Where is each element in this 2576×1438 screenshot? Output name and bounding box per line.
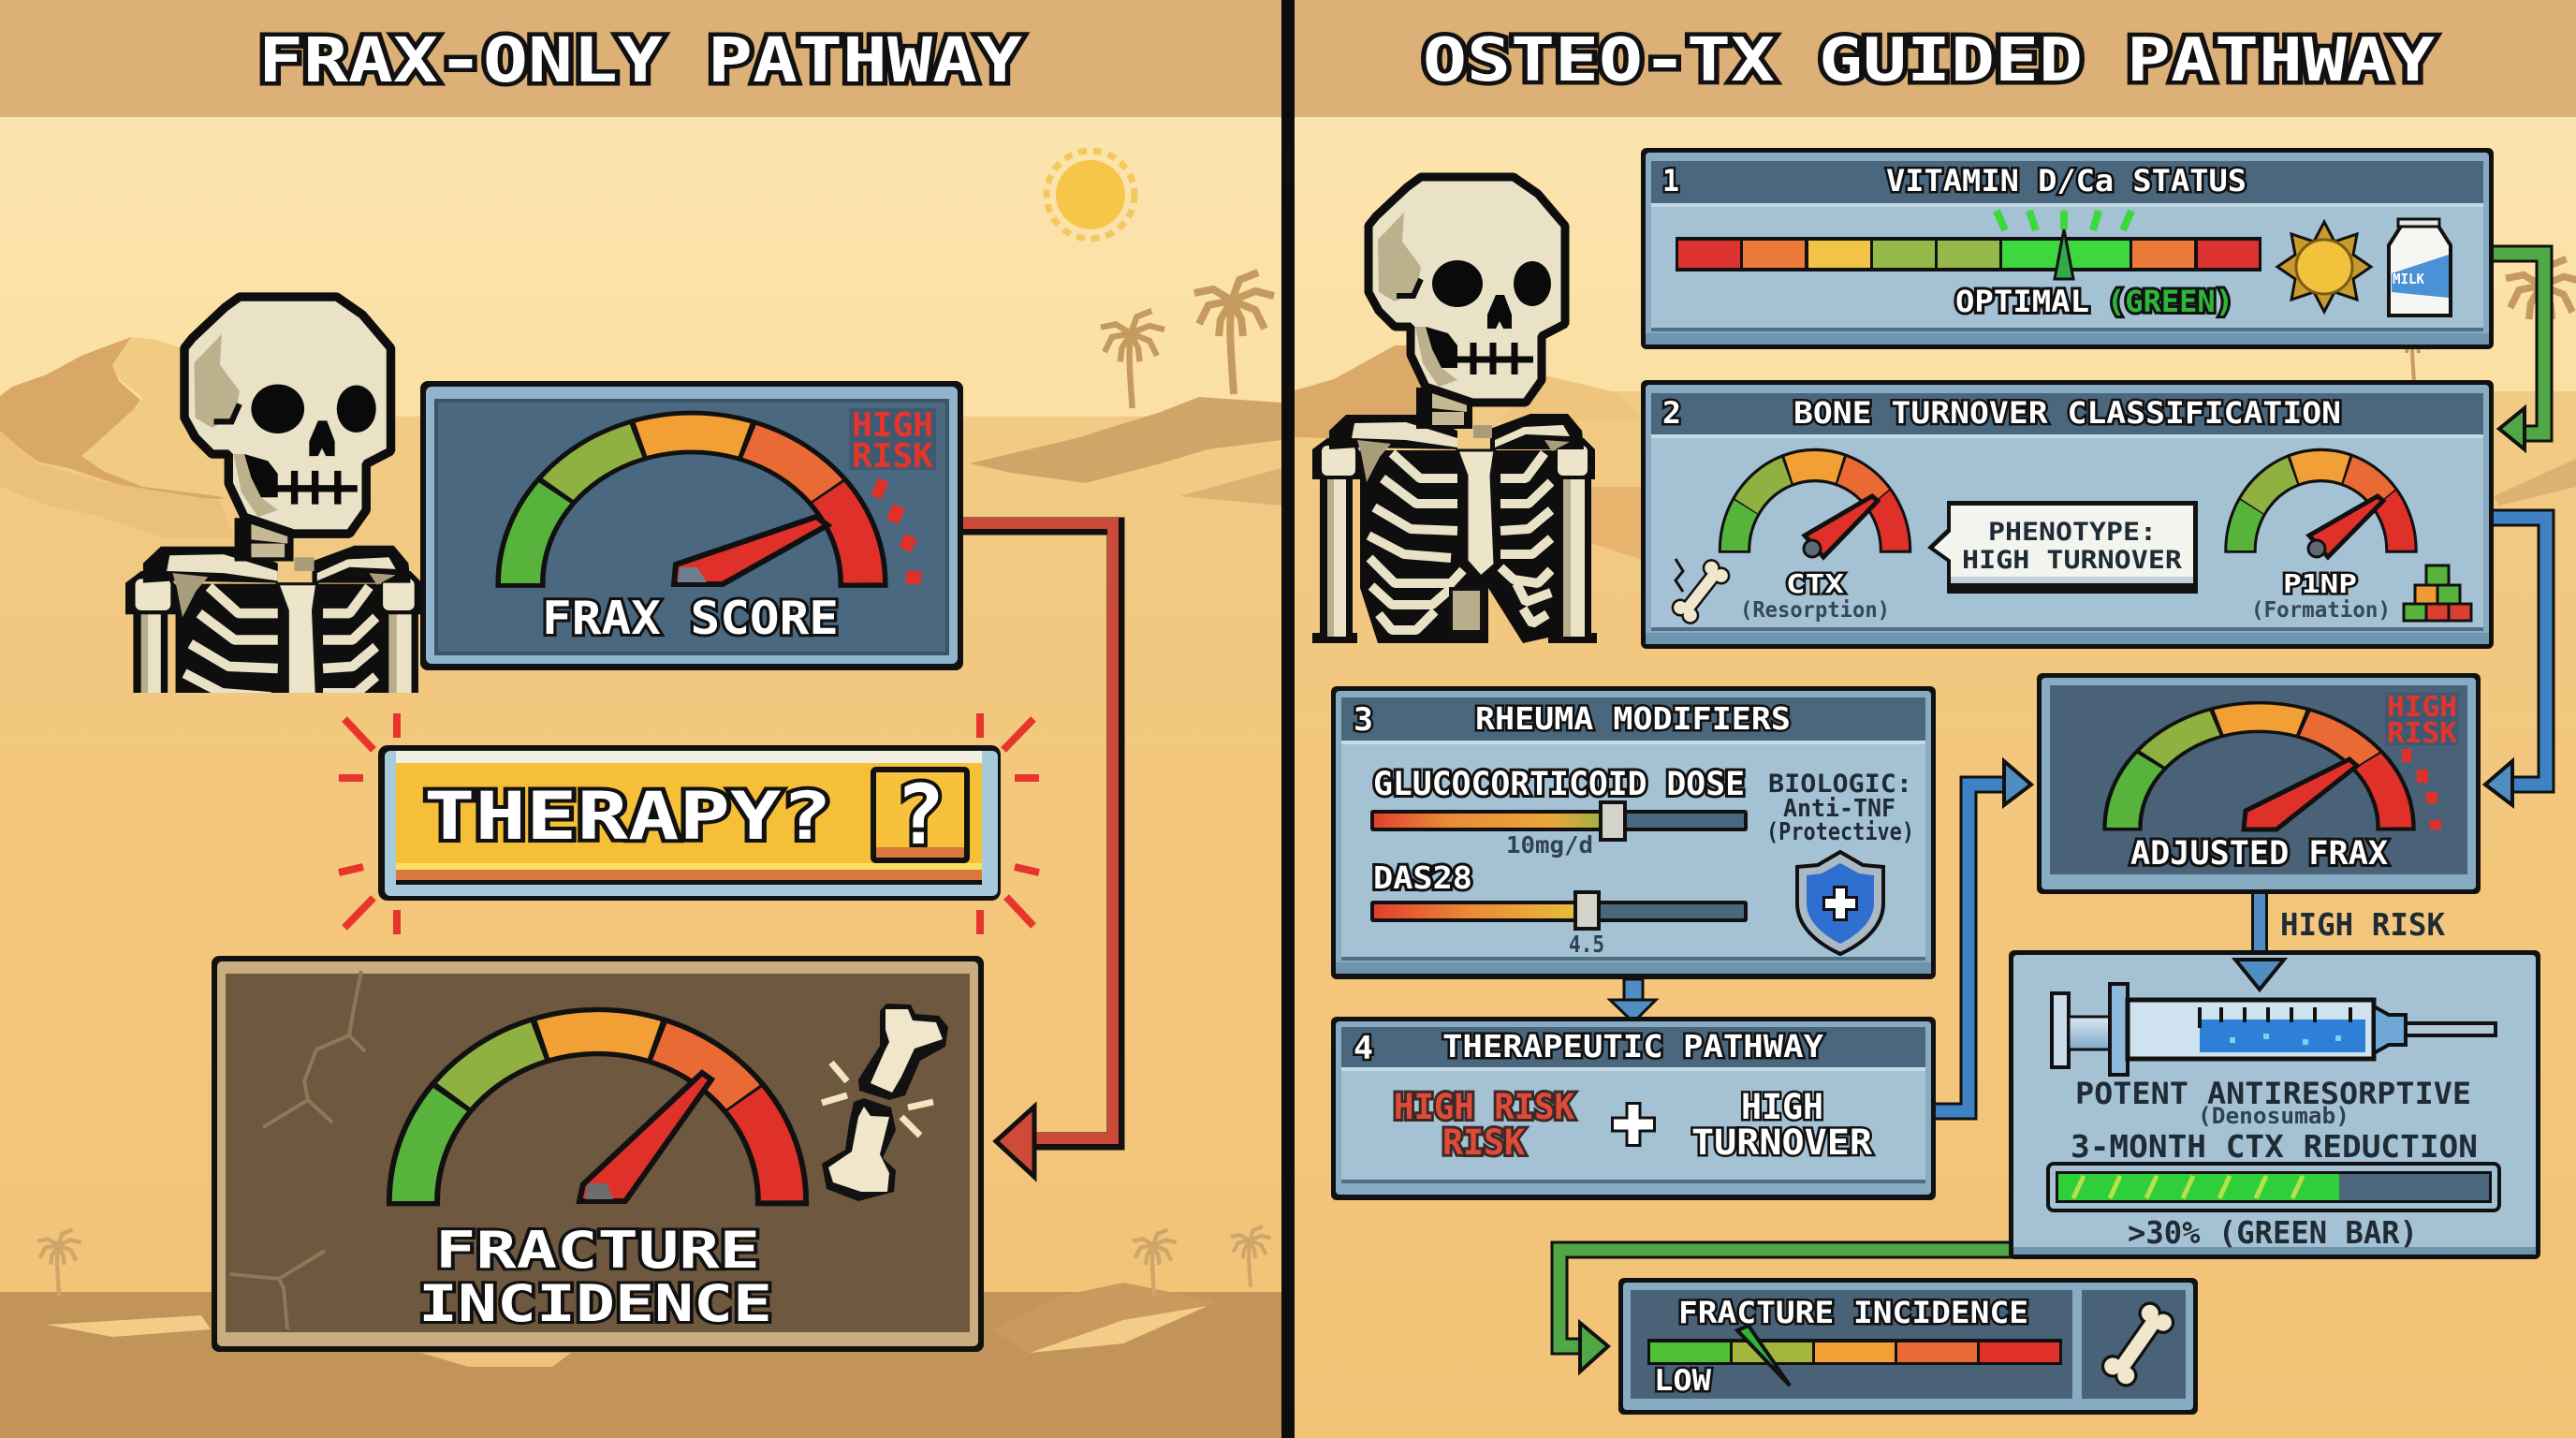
arrow: therapeutic pathway to adjusted FRAX xyxy=(1936,761,2031,1111)
therapy text: POTENT ANTIRESORPTIVE xyxy=(2075,1076,2471,1111)
arrow: bone turnover to adjusted FRAX xyxy=(2485,518,2546,805)
needle: P1NP xyxy=(2308,496,2383,557)
high turnover label xyxy=(1691,1087,1873,1163)
biologic note: BIOLOGIC: xyxy=(1768,770,1912,799)
arrow: rheuma modifiers to therapeutic pathway xyxy=(1610,979,1656,1022)
arrow: FRAX score to fracture incidence xyxy=(963,523,1116,1177)
skeleton: right patient xyxy=(1312,177,1597,643)
heading: BONE TURNOVER CLASSIFICATION xyxy=(1793,395,2341,431)
icon: protective shield xyxy=(1797,852,1883,954)
header band: left xyxy=(0,0,1281,117)
label: adjusted FRAX: ADJUSTED FRAX xyxy=(2130,835,2388,873)
skeleton: left patient xyxy=(125,292,420,693)
panel: FRAX score xyxy=(420,381,963,670)
icon: question mark block xyxy=(871,767,970,863)
icon: milk carton: MILK xyxy=(2393,271,2424,287)
status label xyxy=(1955,284,2233,319)
gauge: adjusted FRAX xyxy=(2123,717,2396,831)
arrow head: into therapy xyxy=(2235,960,2284,990)
alert sparks around therapy button xyxy=(339,713,1039,934)
biologic note: Anti-TNF xyxy=(1783,795,1895,823)
progress bar: CTX reduction xyxy=(2048,1164,2499,1211)
high risk label: HIGH RISK xyxy=(1394,1087,1575,1127)
ground cracks xyxy=(230,971,365,1329)
step number: 3 xyxy=(1354,701,1373,739)
background: right desert scene xyxy=(1295,0,2576,1438)
slider: DAS28: DAS28 xyxy=(1373,859,1472,896)
high turnover label: HIGH xyxy=(1741,1087,1823,1127)
callout: phenotype xyxy=(1927,501,2198,594)
gauge needle xyxy=(579,1073,711,1201)
label: therapy?: THERAPY? xyxy=(424,778,832,855)
badge: high risk xyxy=(2385,691,2459,750)
panel: fracture incidence (FRAX-only) xyxy=(212,956,984,1352)
biologic note xyxy=(1766,770,1914,846)
divider between pathways xyxy=(1281,0,1295,1438)
button: therapy? xyxy=(378,745,1001,901)
panel: 4 therapeutic pathway xyxy=(1331,1017,1936,1200)
slider: glucocorticoid dose: GLUCOCORTICOID DOSE xyxy=(1373,766,1745,803)
panel: potent antiresorptive therapy xyxy=(2009,950,2540,1259)
heading: THERAPEUTIC PATHWAY xyxy=(1442,1028,1823,1064)
label: P1NP xyxy=(2251,568,2391,623)
therapy text xyxy=(2071,1076,2478,1165)
status label: (GREEN) xyxy=(2107,284,2233,319)
icon: syringe xyxy=(2052,984,2496,1075)
label: P1NP: (Formation) xyxy=(2251,598,2391,623)
icon: milk carton xyxy=(2389,219,2451,315)
risk bar xyxy=(1647,1339,2062,1365)
label: low: LOW xyxy=(1654,1364,1711,1398)
label: high risk on arrow: HIGH RISK xyxy=(2280,906,2445,943)
icon: desert sun xyxy=(1046,151,1134,239)
high risk label xyxy=(1394,1087,1575,1163)
colour status bar xyxy=(1676,237,2261,271)
step number: 2 xyxy=(1662,395,1681,431)
label: CTX: CTX xyxy=(1786,568,1844,599)
gauge: FRAX score xyxy=(520,433,863,588)
arrow: vitamin D status to bone turnover xyxy=(2494,254,2544,449)
gauge: P1NP xyxy=(2241,465,2402,553)
icon: healthy bone xyxy=(2097,1298,2179,1391)
gauge needle xyxy=(2244,759,2357,829)
label: fracture incidence xyxy=(418,1221,772,1333)
plus sign xyxy=(1611,1102,1656,1147)
badge: high risk: RISK xyxy=(852,437,933,476)
gauge needle xyxy=(674,517,827,584)
therapy text: (Denosumab) xyxy=(2198,1103,2349,1129)
badge: high risk: HIGH xyxy=(2387,691,2457,724)
icon: sun xyxy=(2277,222,2371,312)
pointer xyxy=(1737,1326,1790,1386)
panel: fracture incidence (guided) xyxy=(1618,1278,2198,1415)
gauge: CTX xyxy=(1734,465,1895,553)
arrow: therapy to fracture incidence xyxy=(1559,1250,2059,1372)
arrow: adjusted FRAX to therapy xyxy=(2251,894,2268,964)
progress label: >30% (GREEN BAR) xyxy=(2128,1214,2418,1251)
slider: DAS28 xyxy=(1370,859,1748,958)
risk sparks xyxy=(2402,749,2441,829)
title: Osteo-Tx guided pathway: OSTEO-TX GUIDED PATHWAY xyxy=(1423,26,2436,95)
panel: adjusted FRAX xyxy=(2037,673,2481,894)
callout: phenotype: HIGH TURNOVER xyxy=(1962,546,2183,575)
risk sparks xyxy=(871,477,921,584)
high turnover label: TURNOVER xyxy=(1691,1123,1873,1163)
panel: 1 vitamin D / calcium status xyxy=(1641,148,2494,349)
gauge: fracture incidence xyxy=(414,1032,783,1206)
label: FRAX score: FRAX SCORE xyxy=(542,592,839,645)
title: FRAX-only pathway: FRAX-ONLY PATHWAY xyxy=(258,24,1022,96)
background: left desert scene xyxy=(0,0,1281,1438)
icon: question mark block: ? xyxy=(896,767,944,863)
step number: 4 xyxy=(1354,1030,1373,1067)
status pointer xyxy=(2055,229,2073,279)
label: CTX xyxy=(1740,568,1890,623)
high risk label: RISK xyxy=(1442,1123,1526,1163)
biologic note: (Protective) xyxy=(1766,818,1914,846)
therapy text: 3-MONTH CTX REDUCTION xyxy=(2071,1128,2478,1165)
icon: formation blocks xyxy=(2404,565,2471,621)
icon: broken bone xyxy=(822,1004,948,1201)
panel: 2 bone turnover classification xyxy=(1641,380,2494,649)
slider: glucocorticoid dose: 10mg/d xyxy=(1506,831,1593,858)
step number: 1 xyxy=(1662,163,1679,198)
callout: phenotype: PHENOTYPE: xyxy=(1988,518,2157,547)
panel: 3 rheuma modifiers xyxy=(1331,686,1936,979)
slider: DAS28: 4.5 xyxy=(1569,931,1604,958)
badge: high risk: HIGH xyxy=(852,406,933,445)
needle: CTX xyxy=(1804,496,1878,557)
status label: OPTIMAL xyxy=(1955,284,2089,319)
icon: resorbing bone xyxy=(1668,555,1734,628)
header band: right xyxy=(1295,0,2576,117)
heading: FRACTURE INCIDENCE xyxy=(1678,1295,2028,1330)
label: P1NP: P1NP xyxy=(2283,568,2357,599)
badge: high risk: RISK xyxy=(2387,717,2457,750)
label: fracture incidence: FRACTURE xyxy=(435,1221,760,1280)
heading: VITAMIN D/Ca STATUS xyxy=(1886,163,2247,198)
green ticks xyxy=(1997,211,2131,230)
heading: RHEUMA MODIFIERS xyxy=(1475,700,1791,737)
label: fracture incidence: INCIDENCE xyxy=(418,1274,772,1333)
badge: high risk xyxy=(849,406,936,476)
slider: glucocorticoid dose xyxy=(1370,766,1748,858)
label: CTX: (Resorption) xyxy=(1740,598,1890,623)
